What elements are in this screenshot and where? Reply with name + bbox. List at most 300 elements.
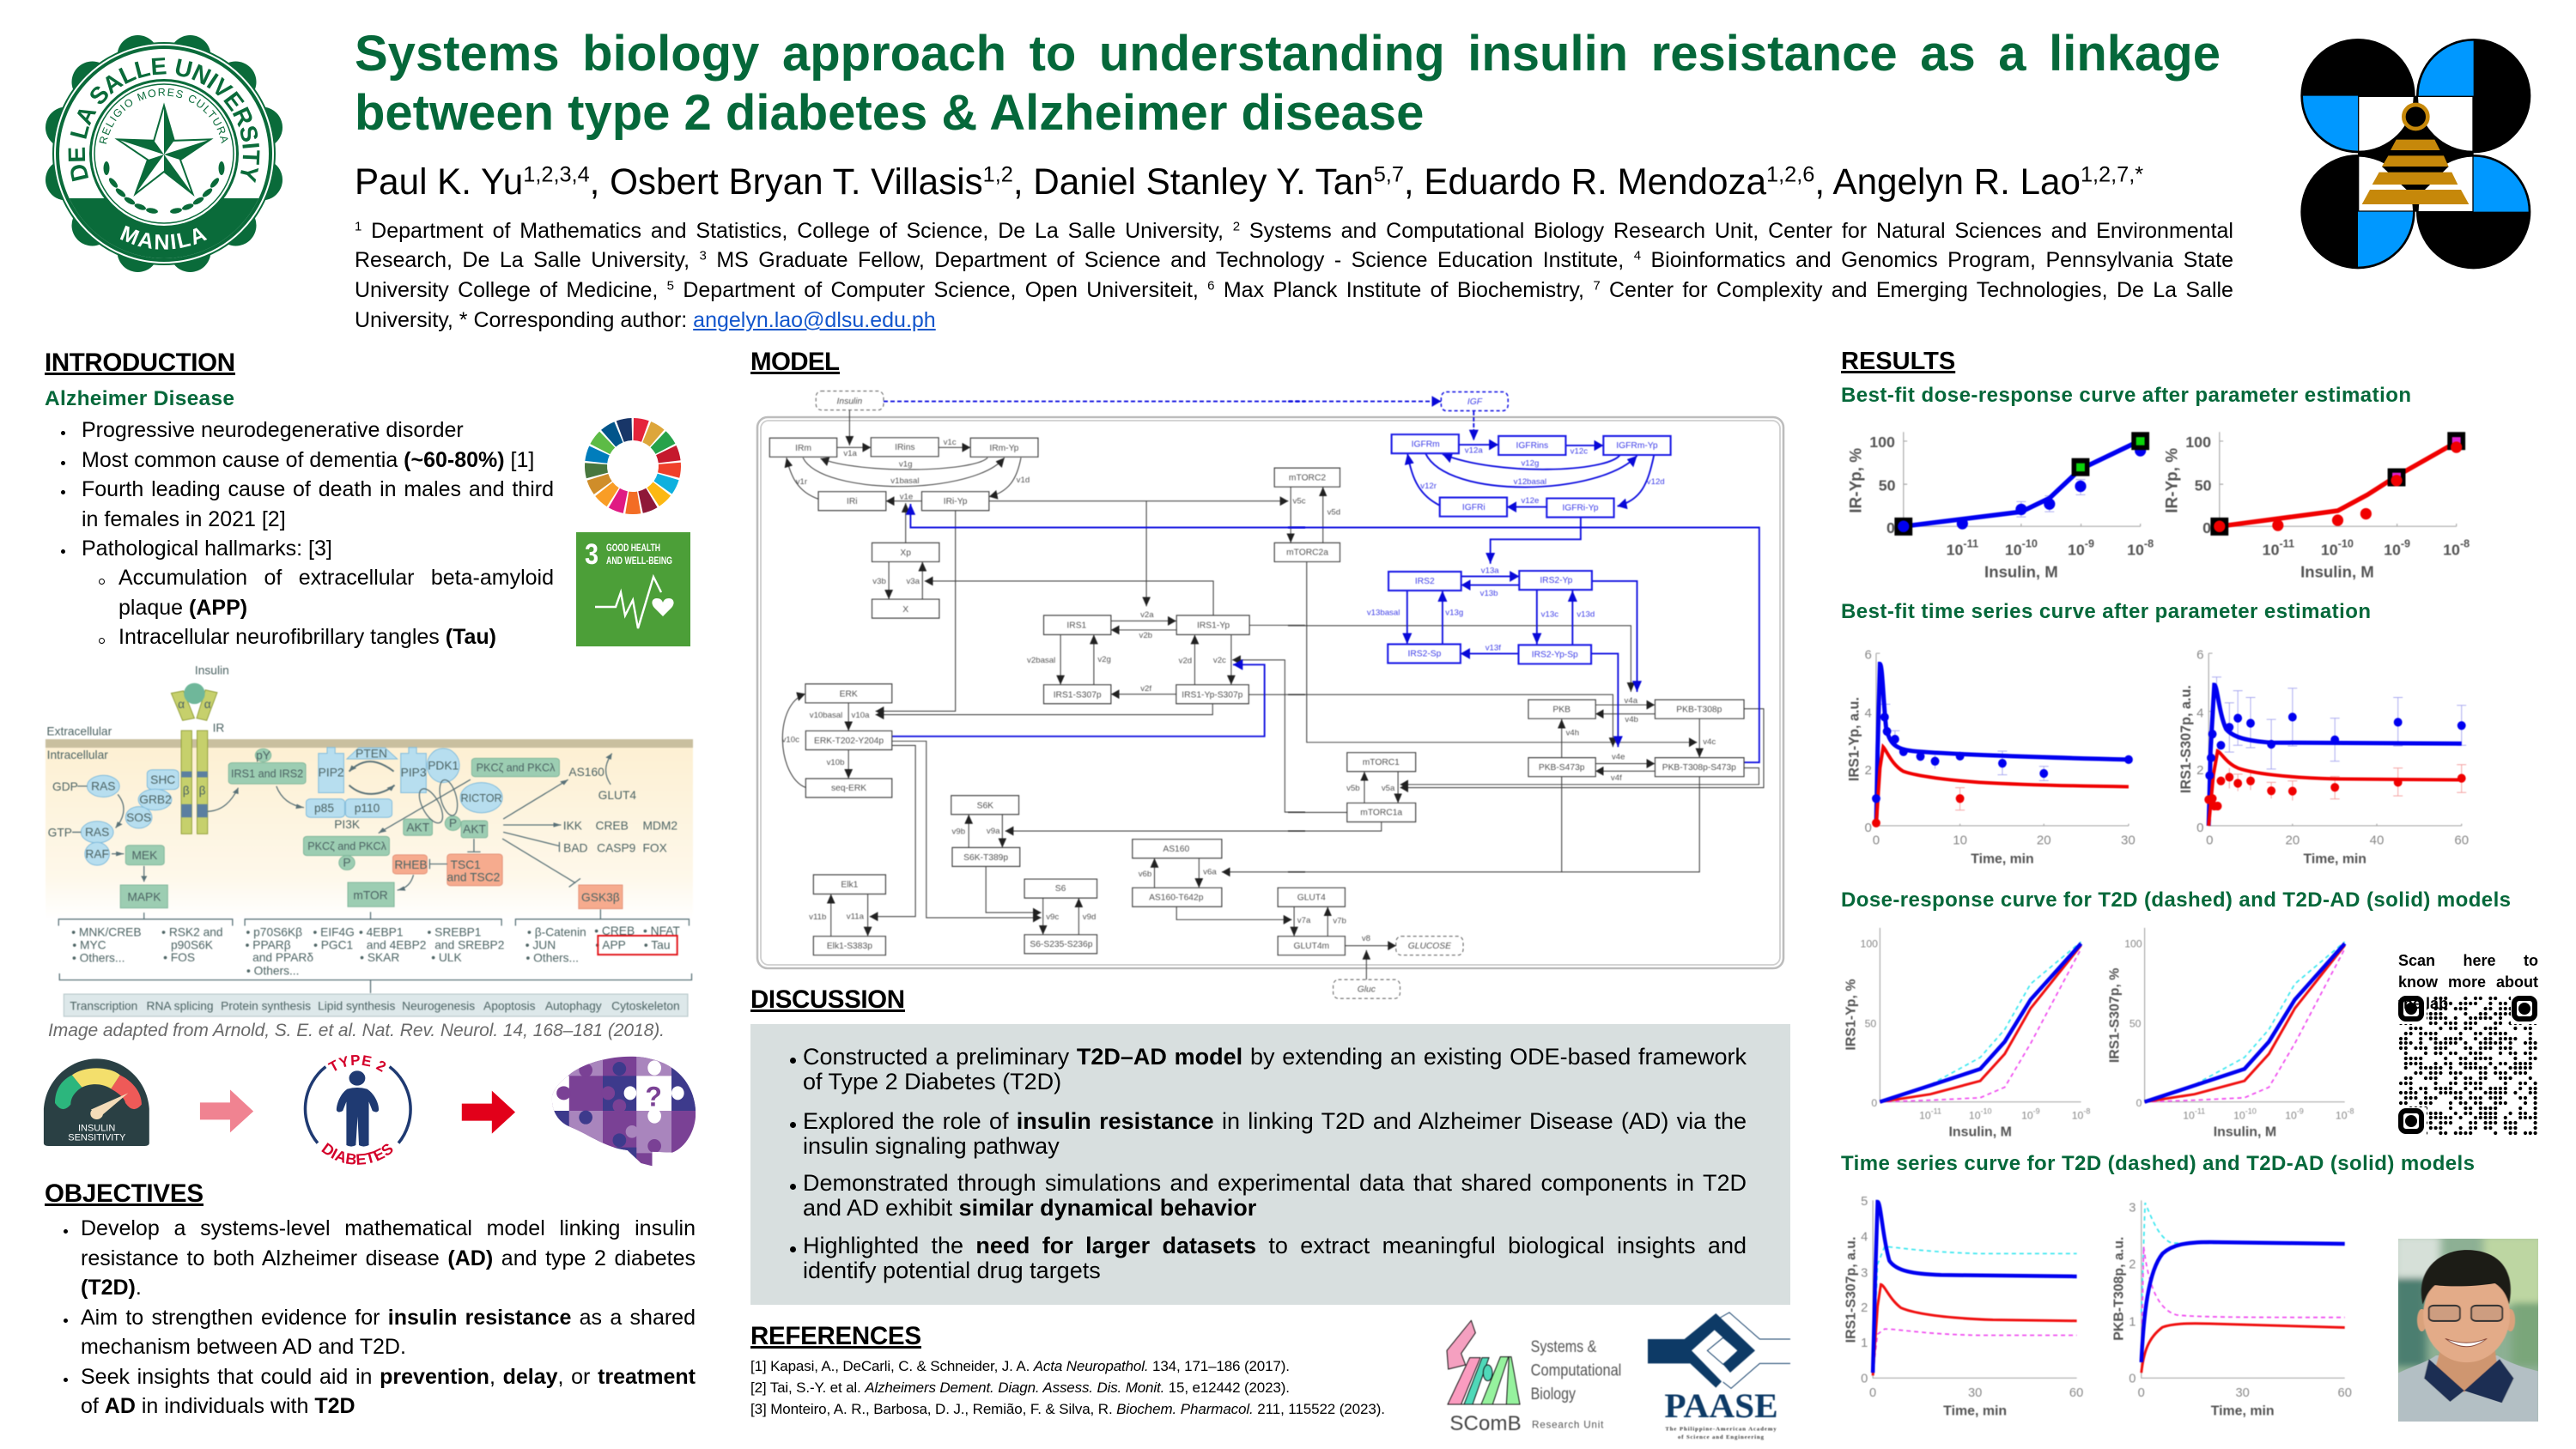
text block: Alzheimer disease bullets: Accumulation of extracellular beta-amyloid	[118, 565, 554, 589]
results subheading: time series models: Time series curve for T2D (dashed) and T2D-AD (solid) models	[1841, 1152, 2475, 1175]
model diagram: insulin pathway, left part: v1e	[900, 492, 913, 501]
heading: Objectives: OBJECTIVES	[45, 1179, 204, 1208]
chart: IRS1-S307p time series: IRS1-S307p, a.u.	[2178, 685, 2194, 793]
model diagram: insulin pathway, left part: v2d	[1179, 656, 1192, 665]
model diagram: insulin pathway, left part: S6	[1055, 884, 1066, 894]
chart: IRS1-S307p time series models: 30	[1968, 1386, 1982, 1400]
figure: insulin signalling pathway: RHEB	[394, 858, 428, 871]
icon: SDG 3 good health tile: GOOD HEALTH	[606, 542, 660, 554]
chart: IRS1-Yp time series: IRS1-Yp, a.u.	[1847, 697, 1862, 781]
chart: IR-Yp dose-response, blue: -9	[2085, 538, 2094, 550]
figure: insulin signalling pathway: GRB2	[139, 793, 172, 806]
figure: insulin signalling pathway: mTOR	[353, 888, 388, 901]
model diagram: IGF pathway, right part: v12d	[1647, 477, 1665, 487]
figure: insulin signalling pathway: Intracellular	[47, 749, 108, 761]
figure: insulin signalling pathway: β	[183, 784, 190, 797]
text block: discussion bullets: Constructed a preliminary T2D–AD model by extending an existing ODE-based framework	[803, 1044, 1747, 1070]
text block: Alzheimer disease bullets: in females in 2021 [2]	[82, 506, 286, 530]
title: between type 2 diabetes & Alzheimer disease	[355, 84, 1424, 141]
model diagram: insulin pathway, left part: v2basal	[1027, 656, 1055, 665]
model diagram: IGF pathway, right part: v13b	[1480, 589, 1498, 598]
chart: IR-Yp dose-response, blue: 10	[2068, 541, 2085, 558]
model diagram: IGF pathway, right part: v7b	[1333, 917, 1346, 926]
figure: insulin signalling pathway: TSC1	[451, 858, 481, 871]
model diagram: insulin pathway, left part: IRi-Yp	[944, 497, 968, 506]
figure: insulin signalling pathway: Apoptosis	[483, 999, 536, 1012]
figure: insulin signalling pathway: PI3K	[334, 818, 361, 831]
figure: insulin signalling pathway: • MYC	[72, 938, 106, 951]
text block: Alzheimer disease bullets: Intracellular neurofibrillary tangles (Tau)	[118, 625, 496, 649]
chart: IRS1-S307p time series: 4	[2196, 706, 2204, 720]
chart: IRS1-S307p dose-response models: 10	[2336, 1109, 2348, 1121]
model diagram: insulin pathway, left part: ERK	[840, 689, 858, 699]
QR code	[2397, 995, 2540, 1137]
model diagram: IGF pathway, right part: PKB	[1552, 705, 1571, 714]
chart: IRS1-Yp time series: 0	[1864, 821, 1872, 835]
text block: objectives	[64, 1216, 696, 1418]
chart: IR-Yp dose-response, red: 10	[2321, 541, 2338, 558]
chart: IRS1-Yp time series: Time, min	[1971, 852, 2034, 866]
chart: IR-Yp dose-response, blue: 10	[2127, 541, 2144, 558]
model diagram: insulin pathway, left part: v10b	[827, 758, 844, 767]
chart: IRS1-S307p dose-response models: 10	[2183, 1109, 2195, 1121]
chart: IR-Yp dose-response, blue: -8	[2144, 538, 2154, 550]
model diagram: IGF pathway, right part: IGF	[1467, 397, 1483, 407]
figure: insulin signalling pathway: • PPARβ	[246, 938, 291, 951]
model diagram: IGF pathway, right part: v4b	[1625, 715, 1638, 724]
model diagram: IGF pathway, right part: v12r	[1420, 482, 1437, 491]
model diagram: insulin pathway, left part: v1a	[843, 449, 858, 458]
model diagram: IGF pathway, right part: mTORC1a	[1360, 809, 1402, 818]
model diagram: IGF pathway, right part: v13c	[1541, 609, 1558, 619]
chart: IRS1-Yp time series: 2	[1864, 763, 1872, 778]
figure: insulin signalling pathway: Transcription	[70, 999, 137, 1012]
model diagram: insulin pathway, left part: v2a	[1140, 610, 1154, 620]
heading: Results: RESULTS	[1841, 348, 1955, 375]
chart: IRS1-Yp dose-response models: -9	[2033, 1107, 2040, 1116]
title: Systems biology approach to understanding insulin resistance as a linkage	[355, 26, 2221, 81]
model diagram: IGF pathway, right part: v12a	[1465, 446, 1483, 456]
chart: IRS1-Yp dose-response models: 10	[2021, 1109, 2033, 1121]
logo: De La Salle University seal: DE LA SALLE UNIVERSITY	[69, 58, 259, 184]
figure: insulin signalling pathway: Extracellular	[46, 725, 112, 738]
model diagram: IGF pathway, right part: v4a	[1625, 696, 1638, 706]
figure: insulin signalling pathway: • p70S6Kβ	[246, 925, 302, 938]
chart: IRS1-S307p dose-response models: 0	[2136, 1097, 2142, 1109]
chart: IRS1-Yp dose-response models: 10	[1919, 1109, 1931, 1121]
model diagram: IGF pathway, right part: IGFRins	[1516, 441, 1548, 451]
chart: IRS1-S307p dose-response models: 10	[2233, 1109, 2245, 1121]
icon row: insulin sensitivity to type 2 diabetes to Alzheimer disease: INSULIN	[78, 1124, 115, 1134]
text block: Alzheimer disease bullets: Pathological hallmarks: [3]	[82, 536, 332, 560]
affiliations: University College of Medicine, 5 Department of Computer Science, Open Universiteit, 6 Max Planck Institute of Biochemistry, 7 Center for Complexity and Emerging Technologies, De La Salle	[355, 278, 2233, 302]
model diagram: IGF pathway, right part: IGFRi-Yp	[1562, 504, 1599, 513]
figure: insulin signalling pathway: RICTOR	[461, 792, 502, 804]
chart: IRS1-Yp dose-response models: -8	[2083, 1107, 2090, 1116]
heading: Discussion: DISCUSSION	[750, 985, 905, 1014]
figure: insulin signalling pathway: pY	[256, 749, 270, 761]
chart: IR-Yp dose-response, blue: 10	[1947, 541, 1963, 558]
figure: insulin signalling pathway: • 4EBP1	[359, 925, 404, 938]
chart: IRS1-Yp time series: 20	[2037, 834, 2051, 848]
affiliations: Research, De La Salle University, 3 MS Graduate Fellow, Department of Science and Technology - Science Education Institute, 4 Bioinformatics and Genomics Program, Pennsylvania State	[355, 248, 2233, 272]
icon row: insulin sensitivity to type 2 diabetes to Alzheimer disease: TYPE 2	[328, 1055, 386, 1072]
logos: SComB research unit and PAASE: SComB	[1449, 1412, 1522, 1435]
figure: insulin signalling pathway: • APP	[595, 938, 626, 951]
model diagram: insulin pathway, left part: X	[902, 605, 908, 615]
charts: best-fit curves	[1847, 432, 2470, 866]
model diagram: IGF pathway, right part: v5b	[1346, 784, 1360, 793]
text block: Alzheimer disease bullets: plaque (APP)	[118, 596, 247, 620]
chart: IRS1-Yp time series: 30	[2121, 834, 2136, 848]
model diagram: insulin pathway, left part: v10a	[852, 711, 870, 720]
chart: IR-Yp dose-response, blue: 100	[1869, 433, 1895, 451]
chart: IRS1-Yp dose-response models: -11	[1931, 1107, 1941, 1116]
model diagram: insulin pathway, left part: ERK-T202-Y204p	[814, 737, 884, 746]
figure: insulin signalling pathway: BAD	[563, 841, 588, 854]
model diagram: insulin pathway, left part: v1g	[899, 459, 912, 469]
chart: IRS1-S307p time series models: 0	[1869, 1386, 1876, 1400]
chart: IRS1-S307p time series models: 4	[1861, 1231, 1868, 1245]
figure: insulin signalling pathway: RAS	[85, 826, 109, 839]
model diagram: IGF pathway, right part: v12e	[1521, 496, 1539, 506]
model diagram: insulin pathway, left part: v2g	[1097, 655, 1111, 664]
chart: IR-Yp dose-response, blue: -11	[1963, 538, 1978, 550]
figure: insulin signalling pathway: and 4EBP2	[367, 938, 426, 951]
figure: insulin signalling pathway: IR	[213, 722, 224, 735]
chart: IR-Yp dose-response, blue: 0	[1886, 519, 1895, 537]
chart: IRS1-S307p time series models	[1844, 1195, 2083, 1419]
chart: IRS1-Yp time series: 0	[1873, 834, 1880, 848]
model diagram: insulin pathway, left part: AS160-T642p	[1149, 893, 1204, 902]
figure: insulin signalling pathway: PKCζ and PKCλ	[477, 762, 556, 774]
chart: IRS1-S307p dose-response models	[2107, 928, 2354, 1139]
results subheading: best-fit dose-response: Best-fit dose-response curve after parameter estimation	[1841, 384, 2411, 407]
model diagram: insulin pathway, left part: v1r	[796, 477, 808, 487]
model diagram: IGF pathway, right part: v12basal	[1514, 477, 1546, 487]
chart: IR-Yp dose-response, blue: Insulin, M	[1984, 563, 2058, 580]
model diagram: IGF pathway, right part: mTORC2a	[1286, 549, 1328, 558]
chart: IRS1-S307p dose-response models: Insulin, M	[2214, 1125, 2276, 1139]
figure: insulin signalling pathway: GLUT4	[598, 789, 636, 802]
figure: insulin signalling pathway: IKK	[563, 820, 583, 833]
affiliations: University, * Corresponding author: angelyn.lao@dlsu.edu.ph	[355, 308, 936, 332]
chart: IR-Yp dose-response, blue: 10	[2005, 541, 2022, 558]
chart: IRS1-Yp dose-response models	[1844, 928, 2090, 1139]
figure: insulin signalling pathway	[46, 664, 693, 1016]
figure: insulin signalling pathway: MDM2	[643, 820, 677, 833]
text block: scan QR prompt: know more about	[2398, 973, 2538, 991]
model diagram: IGF pathway, right part: v4h	[1566, 728, 1579, 737]
model diagram: insulin pathway, left part: Elk1	[841, 881, 859, 890]
chart: IRS1-S307p time series: Time, min	[2303, 852, 2366, 866]
logos: SComB research unit and PAASE: The Philippine-American Academy	[1665, 1427, 1777, 1433]
model diagram: IGF pathway, right part: Gluc	[1358, 985, 1376, 994]
references list	[750, 1358, 1385, 1417]
logo: De La Salle University seal	[46, 35, 283, 272]
chart: IRS1-Yp time series: 4	[1864, 706, 1872, 720]
icon row: insulin sensitivity to type 2 diabetes to Alzheimer disease	[43, 1055, 696, 1166]
chart: IRS1-S307p dose-response models: -11	[2195, 1107, 2205, 1116]
figure: insulin signalling pathway: • JUN	[526, 938, 556, 951]
model diagram: insulin pathway, left part: v9d	[1083, 912, 1096, 922]
references list: [3] Monteiro, A. R., Barbosa, D. J., Remião, F. & Silva, R. Biochem. Pharmacol. 211, 115522 (2023).	[750, 1401, 1385, 1417]
figure: insulin signalling pathway: • Others...	[246, 964, 299, 977]
chart: IRS1-S307p time series	[2178, 647, 2469, 866]
model diagram: IGF pathway, right part: PKB-T308p-S473p	[1662, 763, 1736, 773]
figure: insulin signalling pathway: • EIF4G	[313, 925, 355, 938]
text block: scan QR prompt: Scan here to	[2398, 952, 2538, 969]
chart: IRS1-Yp time series: 10	[1953, 834, 1967, 848]
model diagram: insulin pathway, left part: v6b	[1139, 870, 1151, 879]
figure: insulin signalling pathway: • NFAT	[643, 925, 680, 937]
chart: IRS1-S307p time series: 0	[2206, 834, 2213, 848]
chart: PKB-T308p time series models: 2	[2129, 1258, 2136, 1272]
icon: SDG 3 good health tile: 3	[585, 538, 598, 571]
chart: IRS1-S307p time series models: 3	[1861, 1266, 1868, 1280]
figure: insulin signalling pathway: GSK3β	[581, 891, 620, 904]
figure: insulin signalling pathway: • RSK2 and	[161, 925, 223, 938]
model diagram: insulin pathway, left part: S6-S235-S236p	[1030, 940, 1093, 949]
logos: SComB research unit and PAASE: Biology	[1531, 1385, 1576, 1404]
logos: SComB research unit and PAASE: Systems &	[1531, 1338, 1596, 1356]
figure: insulin signalling pathway: α	[178, 698, 185, 711]
chart: PKB-T308p time series models	[2111, 1200, 2352, 1419]
text block: discussion bullets: identify potential drug targets	[803, 1258, 1101, 1283]
text block: Alzheimer disease bullets: Progressive neurodegenerative disorder	[82, 417, 464, 441]
model diagram: IGF pathway, right part: mTORC1	[1363, 758, 1400, 767]
model diagram: IGF pathway, right part: IGFRi	[1462, 503, 1485, 512]
chart: IRS1-Yp dose-response models: 10	[2072, 1109, 2083, 1121]
model diagram: insulin pathway, left part: v10basal	[810, 711, 842, 720]
text block: discussion bullets: insulin signaling pathway	[803, 1133, 1060, 1159]
model diagram: insulin pathway, left part: v9b	[952, 828, 965, 837]
figure: insulin signalling pathway: GDP	[52, 780, 78, 793]
model diagram: insulin pathway, left part: IRS1-Yp	[1197, 621, 1230, 631]
figure: insulin signalling pathway: MAPK	[127, 890, 161, 903]
model diagram: IGF pathway, right part: v5a	[1382, 784, 1395, 793]
authors: Paul K. Yu1,2,3,4, Osbert Bryan T. Villasis1,2, Daniel Stanley Y. Tan5,7, Eduardo R. Mendoza1,2,6, Angelyn R. Lao1,2,7,*	[355, 161, 2143, 202]
text block: discussion bullets: Demonstrated through simulations and experimental data that shared components in T2D	[803, 1170, 1747, 1196]
figure: insulin signalling pathway: PIP2	[319, 767, 344, 779]
chart: IR-Yp dose-response, blue	[1847, 432, 2154, 580]
chart: IRS1-S307p time series: 60	[2454, 834, 2469, 848]
figure: insulin signalling pathway: AKT	[463, 823, 487, 836]
model diagram: IGF pathway, right part: v13d	[1577, 609, 1595, 619]
logo: De La Salle University seal: MANILA	[120, 225, 208, 250]
model diagram: insulin pathway, left part: IRm-Yp	[989, 444, 1019, 453]
model diagram: IGF pathway, right part: mTORC2	[1289, 473, 1326, 482]
model diagram: IGF pathway, right part: v13f	[1485, 643, 1501, 652]
text block: objectives: mechanism between AD and T2D.	[81, 1335, 406, 1359]
logos: SComB research unit and PAASE: PAASE	[1664, 1386, 1778, 1425]
text block: Alzheimer disease bullets	[61, 417, 554, 649]
model diagram: IGF pathway, right part: IGFRm-Yp	[1616, 441, 1658, 451]
chart: IR-Yp dose-response, red: 0	[2202, 519, 2211, 537]
chart: PKB-T308p time series models: 0	[2129, 1373, 2136, 1386]
chart: IRS1-S307p time series models: Time, min	[1943, 1404, 2007, 1419]
chart: IRS1-S307p time series: 20	[2285, 834, 2300, 848]
figure: insulin signalling pathway: • Others...	[526, 952, 579, 965]
chart: IR-Yp dose-response, blue: IR-Yp, %	[1847, 448, 1865, 513]
panel: discussion background	[750, 1024, 1790, 1305]
figure: insulin signalling pathway: AS160	[568, 766, 605, 779]
figure: insulin signalling pathway: p110	[355, 802, 380, 815]
figure: insulin signalling pathway: PDK1	[428, 759, 459, 772]
chart: IRS1-S307p dose-response models: 50	[2129, 1018, 2142, 1030]
icon: SDG colour wheel	[580, 414, 685, 518]
model diagram: IGF pathway, right part: v13a	[1481, 567, 1499, 576]
model diagram: insulin pathway, left part: v1basal	[890, 476, 919, 486]
figure: insulin signalling pathway: Autophagy	[545, 999, 602, 1012]
chart: IR-Yp dose-response, red: IR-Yp, %	[2163, 448, 2181, 513]
chart: IRS1-Yp dose-response models: 10	[1969, 1109, 1981, 1121]
logos: SComB research unit and PAASE: Computational	[1531, 1362, 1621, 1380]
model diagram: insulin pathway, left part: Insulin	[837, 397, 862, 406]
photo: presenter portrait	[2398, 1239, 2538, 1422]
chart: IR-Yp dose-response, red: 10	[2263, 541, 2279, 558]
icon row: insulin sensitivity to type 2 diabetes to Alzheimer disease: DIABETES	[321, 1143, 393, 1165]
model diagram: IGF pathway, right part: IGFRm	[1412, 440, 1440, 449]
chart: IR-Yp dose-response, blue: -10	[2022, 538, 2038, 550]
figure: insulin signalling pathway: CASP9	[597, 841, 635, 854]
chart: PKB-T308p time series models: Time, min	[2211, 1404, 2275, 1419]
figure: insulin signalling pathway: • β-Catenin	[527, 925, 586, 938]
model diagram: insulin pathway, left part: v9a	[987, 827, 1000, 836]
model diagram: insulin pathway, left part: v10c	[782, 736, 799, 745]
chart: PKB-T308p time series models: 1	[2129, 1315, 2136, 1329]
chart: PKB-T308p time series models: 0	[2138, 1386, 2145, 1400]
figure: insulin signalling pathway: • FOS	[163, 951, 195, 964]
text block: objectives: of AD in individuals with T2D	[81, 1394, 355, 1418]
model diagram: IGF pathway, right part: PKB-S473p	[1539, 763, 1585, 773]
chart: IRS1-S307p dose-response models: -10	[2245, 1107, 2257, 1116]
chart: IRS1-S307p time series models: 0	[1861, 1373, 1868, 1386]
figure: insulin signalling pathway: P	[343, 857, 351, 870]
chart: IRS1-S307p time series: 6	[2196, 647, 2204, 662]
results subheading: best-fit time series: Best-fit time series curve after parameter estimation	[1841, 600, 2371, 623]
chart: PKB-T308p time series models: 30	[2236, 1386, 2250, 1400]
model diagram: insulin pathway, left part: Xp	[900, 549, 911, 558]
figure: insulin signalling pathway: and TSC2	[447, 870, 500, 883]
model diagram: insulin pathway, left part: v1d	[1017, 476, 1030, 485]
model diagram: insulin pathway, left part: v6a	[1203, 868, 1217, 877]
figure: insulin signalling pathway: • ULK	[431, 951, 462, 964]
figure: insulin signalling pathway: • Tau	[644, 938, 671, 951]
model diagram: insulin pathway, left part: IRins	[895, 443, 915, 452]
model diagram: IGF pathway, right part: v5d	[1327, 507, 1340, 517]
text block: discussion bullets: Highlighted the need for larger datasets to extract meaningful biological insights and	[803, 1233, 1747, 1258]
chart: IRS1-Yp time series	[1847, 647, 2136, 866]
figure: insulin signalling pathway: GTP	[48, 826, 72, 839]
figure: insulin signalling pathway: β	[199, 784, 206, 797]
figure: insulin signalling pathway: Cytoskeleton	[611, 999, 680, 1012]
model diagram: insulin pathway, left part: v3b	[872, 577, 886, 586]
affiliations	[355, 219, 2233, 332]
model diagram: insulin pathway, left part: v1c	[944, 438, 957, 447]
figure: insulin signalling pathway: P	[449, 817, 457, 830]
model diagram: IGF pathway, right part: v8	[1362, 934, 1370, 943]
chart: IRS1-S307p dose-response models: 10	[2285, 1109, 2297, 1121]
chart: PKB-T308p time series models: PKB-T308p, a.u.	[2111, 1237, 2126, 1341]
subheading: Alzheimer Disease: Alzheimer Disease	[45, 387, 234, 410]
logos: SComB research unit and PAASE: of Science and Engineering	[1678, 1434, 1765, 1440]
text block: scan QR prompt	[2398, 952, 2538, 1012]
chart: IRS1-S307p time series models: 1	[1861, 1337, 1868, 1350]
chart: IR-Yp dose-response, red: 100	[2185, 433, 2211, 451]
figure: insulin signalling pathway: CREB	[596, 820, 629, 833]
figure: insulin signalling pathway: PTEN	[355, 748, 387, 761]
text block: discussion bullets	[790, 1044, 1747, 1283]
figure: insulin signalling pathway: • CREB	[594, 925, 635, 937]
chart: IRS1-S307p time series models: 2	[1861, 1301, 1868, 1315]
figure caption: Image adapted from Arnold, S. E. et al. Nat. Rev. Neurol. 14, 168–181 (2018).	[48, 1021, 665, 1040]
chart: IRS1-Yp dose-response models: 100	[1861, 937, 1878, 949]
figure: insulin signalling pathway: SHC	[150, 773, 175, 786]
model diagram: insulin pathway, left part: Elk1-S383p	[827, 942, 872, 951]
figure: insulin signalling pathway: PIP3	[401, 767, 427, 779]
logos: SComB research unit and PAASE	[1447, 1313, 1790, 1440]
chart: IRS1-S307p time series: 2	[2196, 763, 2204, 778]
model frame	[757, 417, 1783, 968]
chart: IRS1-S307p dose-response models: -8	[2348, 1107, 2354, 1116]
figure: insulin signalling pathway: α	[204, 698, 211, 711]
figure: insulin signalling pathway: RNA splicing	[147, 999, 214, 1012]
model diagram: insulin pathway, left part: v2c	[1213, 656, 1226, 665]
logo: Department of Science and Technology	[2300, 39, 2531, 270]
figure: insulin signalling pathway: Neurogenesis	[402, 999, 475, 1012]
chart: IRS1-Yp dose-response models: IRS1-Yp, %	[1844, 979, 1858, 1051]
model diagram: insulin pathway, left part: S6K-T389p	[963, 853, 1008, 863]
figure: insulin signalling pathway: p85	[314, 802, 334, 815]
model diagram: insulin pathway, left part: v2b	[1139, 631, 1152, 640]
chart: IRS1-S307p time series models: 60	[2069, 1386, 2083, 1400]
chart: IRS1-Yp dose-response models: 50	[1865, 1018, 1876, 1030]
model diagram: insulin pathway, left part	[769, 391, 1305, 955]
results subheading: dose-response models: Dose-response curve for T2D (dashed) and T2D-AD (solid) models	[1841, 888, 2511, 912]
chart: IRS1-S307p time series: 40	[2370, 834, 2384, 848]
model diagram: IGF pathway, right part: IRS2-Sp	[1408, 650, 1442, 659]
model diagram: IGF pathway, right part: GLUCOSE	[1408, 942, 1451, 951]
model diagram: IGF pathway, right part: IRS2	[1415, 577, 1435, 586]
figure: insulin signalling pathway: IRS1 and IRS2	[231, 768, 303, 780]
chart: IR-Yp dose-response, red: 50	[2195, 476, 2212, 494]
text block: objectives: Seek insights that could aid in prevention, delay, or treatment	[81, 1365, 696, 1389]
chart: IR-Yp dose-response, red: Insulin, M	[2300, 563, 2374, 580]
model diagram: insulin pathway, left part: S6K	[977, 801, 993, 810]
model diagram: insulin pathway, left part: IRS1-S307p	[1054, 690, 1102, 700]
model diagram: insulin pathway, left part: v11a	[847, 912, 865, 921]
model diagram: insulin pathway, left part: IRS1	[1066, 621, 1087, 631]
chart: IR-Yp dose-response, blue: 50	[1879, 476, 1896, 494]
icon: SDG 3 good health tile	[576, 532, 690, 646]
model diagram: IGF pathway, right part: IRS2-Yp	[1540, 576, 1573, 585]
model diagram: insulin pathway, left part: seq-ERK	[831, 784, 866, 793]
chart: IRS1-S307p dose-response models: 100	[2124, 937, 2142, 949]
chart: PKB-T308p time series models: 3	[2129, 1201, 2136, 1215]
figure: insulin signalling pathway: and SREBP2	[434, 938, 504, 951]
chart: IRS1-S307p time series models: 5	[1861, 1195, 1868, 1209]
heading: References: REFERENCES	[750, 1322, 921, 1350]
text block: Alzheimer disease bullets: Fourth leading cause of death in males and third	[82, 477, 554, 501]
model diagram: insulin pathway, left part: IRi	[847, 497, 858, 506]
figure: insulin signalling pathway: PKCζ and PKCλ	[307, 840, 387, 852]
chart: IRS1-Yp dose-response models: 0	[1871, 1097, 1877, 1109]
text block: objectives: (T2D).	[81, 1276, 142, 1300]
model diagram: insulin pathway, left part: IRm	[795, 444, 811, 453]
icon: SDG 3 good health tile: AND WELL-BEING	[606, 555, 672, 567]
figure: insulin signalling pathway: SOS	[126, 811, 151, 824]
